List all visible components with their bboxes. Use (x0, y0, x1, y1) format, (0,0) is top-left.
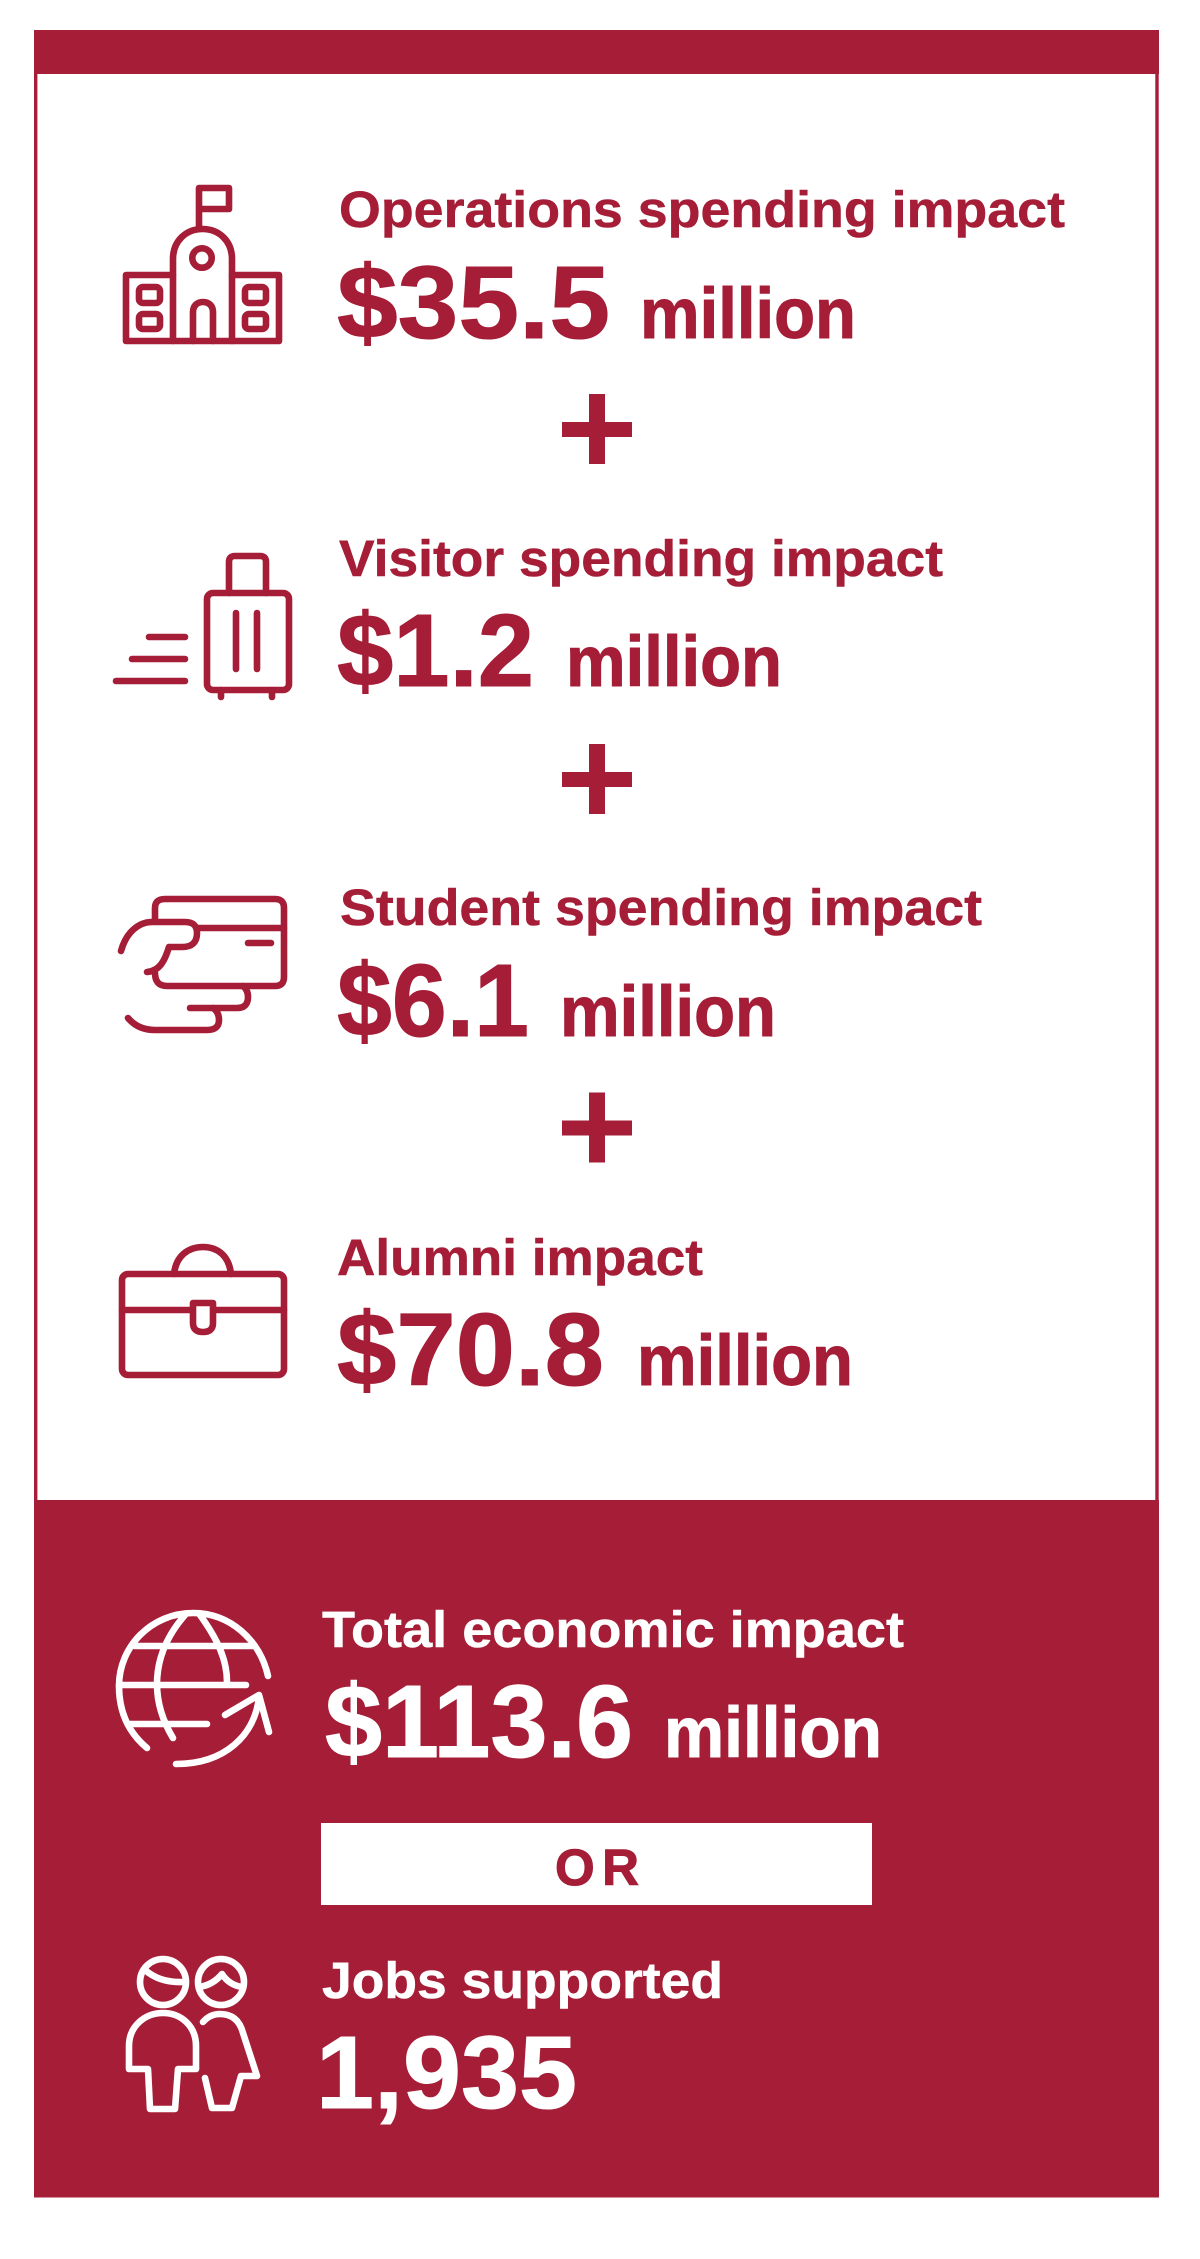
icon: two people (129, 1959, 257, 2109)
header bar (34, 30, 1159, 74)
heading: operations: Operations spending impact (339, 181, 1065, 238)
value: visitor: million (566, 623, 782, 702)
icon: globe with arrow (119, 1613, 269, 1764)
panel: operations spending (126, 181, 1065, 360)
panel: frame (36, 32, 1157, 1522)
panel: alumni (122, 1229, 853, 1407)
panel: visitor spending (116, 530, 943, 708)
icon: plus two (562, 744, 632, 814)
value: total: million (664, 1694, 882, 1773)
heading: student: Student spending impact (340, 879, 982, 936)
heading: visitor: Visitor spending impact (339, 530, 943, 587)
panel background (34, 1500, 1159, 2198)
icon: plus one (562, 394, 632, 464)
value: operations: $35.5 (337, 245, 610, 360)
value: jobs: 1,935 (316, 2015, 577, 2130)
value: total: $113.6 (325, 1664, 633, 1779)
panel: student spending (121, 879, 982, 1058)
icon: school (126, 188, 279, 341)
value: student: million (560, 973, 776, 1052)
value: operations: million (640, 275, 856, 354)
value: alumni: $70.8 (337, 1292, 604, 1407)
panel: totals (34, 1500, 1159, 2198)
icon: suitcase (116, 556, 289, 697)
heading: jobs: Jobs supported (322, 1952, 723, 2009)
icon: hand with card (121, 899, 284, 1030)
callout: or box (321, 1823, 872, 1905)
heading: total: Total economic impact (322, 1601, 904, 1658)
value: visitor: $1.2 (337, 593, 534, 708)
value: alumni: million (637, 1322, 853, 1401)
heading: alumni: Alumni impact (337, 1229, 703, 1286)
icon: plus three (562, 1092, 632, 1162)
callout: or box: OR (555, 1839, 639, 1896)
icon: briefcase (122, 1247, 284, 1375)
value: student: $6.1 (337, 943, 529, 1058)
